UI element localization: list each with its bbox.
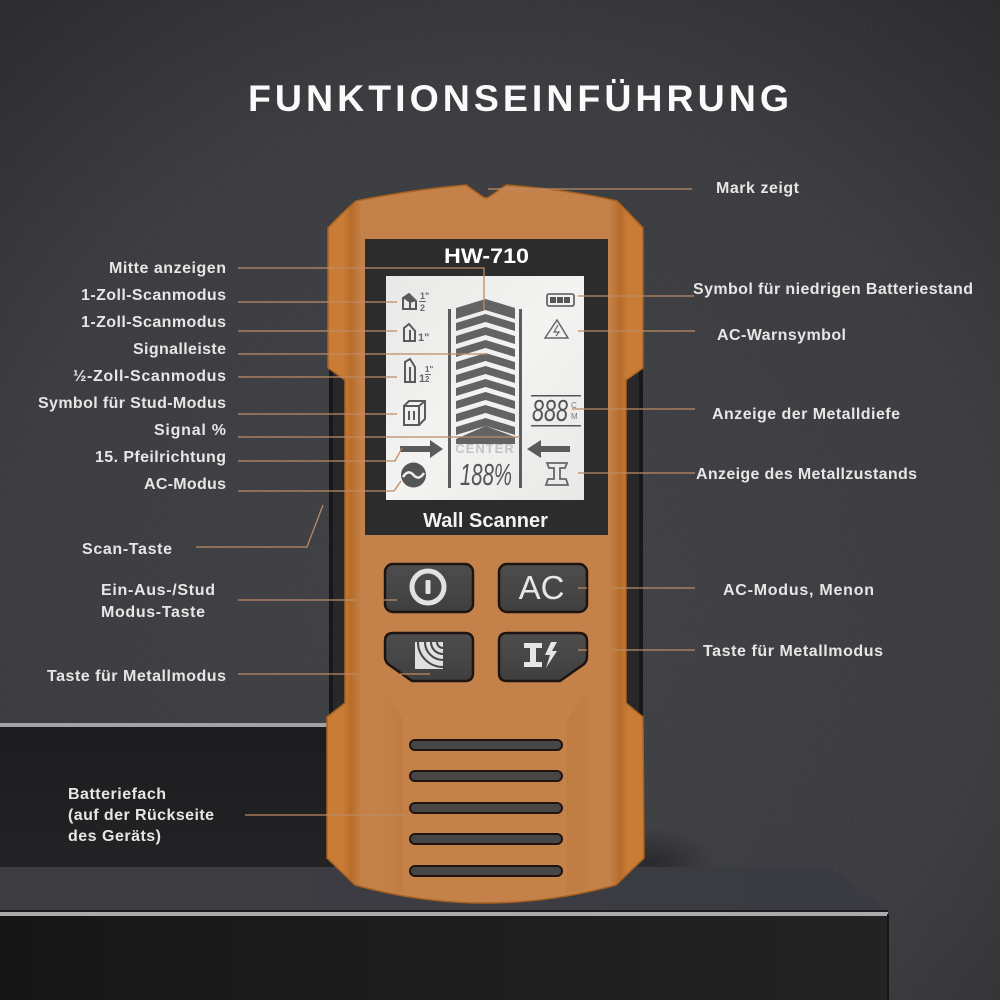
icon: left arrow xyxy=(400,440,443,458)
left labels: Ein-Aus-/Stud xyxy=(101,582,215,599)
left labels: Signalleiste xyxy=(133,341,226,358)
right labels: Anzeige des Metallzustands xyxy=(696,466,917,483)
left labels: Scan-Taste xyxy=(82,541,172,558)
device: wall scanner xyxy=(327,185,644,903)
right labels xyxy=(693,180,973,660)
power button xyxy=(385,564,473,612)
icon: battery xyxy=(547,294,574,306)
left labels: Symbol für Stud-Modus xyxy=(38,395,226,412)
left labels: (auf der Rückseite xyxy=(68,807,214,824)
left labels xyxy=(38,260,226,845)
right labels: Mark zeigt xyxy=(716,180,800,197)
icon: one and half inch mode: 1 xyxy=(419,373,425,385)
right labels: AC-Warnsymbol xyxy=(717,327,846,344)
screen xyxy=(365,239,608,535)
left labels: des Geräts) xyxy=(68,828,161,845)
left labels: 1-Zoll-Scanmodus xyxy=(81,287,226,304)
AC button: AC xyxy=(519,569,564,606)
title: FUNKTIONSEINFÜHRUNG xyxy=(248,77,789,119)
AC button xyxy=(499,564,587,612)
left labels: Modus-Taste xyxy=(101,604,205,621)
left labels: Mitte anzeigen xyxy=(109,260,226,277)
back shelf block xyxy=(0,723,335,867)
icon: one inch mode xyxy=(404,324,429,344)
metal depth readout: C xyxy=(571,401,577,410)
leader lines xyxy=(196,189,695,815)
icon: AC mode xyxy=(401,462,426,488)
icon: half inch mode xyxy=(403,291,429,313)
scan mode button xyxy=(385,633,473,681)
left labels: Batteriefach xyxy=(68,786,166,803)
device shadow on wall xyxy=(585,828,715,896)
signal chevron bar xyxy=(456,299,515,444)
icon: half inch mode: 2 xyxy=(420,303,425,313)
right labels: Symbol für niedrigen Batteriestand xyxy=(693,281,973,298)
scanner body xyxy=(327,185,644,903)
icon: one inch mode: 1" xyxy=(418,332,429,344)
metal depth readout: M xyxy=(571,412,578,421)
side grips xyxy=(329,368,643,718)
left labels: Taste für Metallmodus xyxy=(47,668,226,685)
metal mode button xyxy=(499,633,587,681)
signal percent readout: 188% xyxy=(460,457,512,492)
signal rails xyxy=(448,309,522,488)
lower flank shading xyxy=(377,677,597,893)
left labels: 15. Pfeilrichtung xyxy=(95,449,226,466)
icon: one and half inch mode: 2 xyxy=(425,375,430,384)
icon: half inch mode: 1" xyxy=(420,291,429,301)
lcd display xyxy=(386,276,584,500)
product name: Wall Scanner xyxy=(423,510,548,532)
icon: one and half inch mode xyxy=(405,359,433,385)
left labels: AC-Modus xyxy=(144,476,226,493)
right labels: AC-Modus, Menon xyxy=(723,582,874,599)
icon: power xyxy=(412,571,444,603)
icon: signal waves xyxy=(415,642,443,669)
icon: right arrow xyxy=(527,440,570,458)
right labels: Anzeige der Metalldiefe xyxy=(712,406,900,423)
icon: stud mode xyxy=(404,401,425,425)
center text: CENTER xyxy=(455,441,515,456)
icon: metal beam xyxy=(546,463,568,485)
front shelf xyxy=(0,867,889,1000)
icon: one and half inch mode: 1" xyxy=(425,365,433,374)
icon: beam and bolt xyxy=(524,642,557,668)
icon: AC warning xyxy=(545,320,568,338)
metal depth readout: 888 xyxy=(532,393,569,428)
right labels: Taste für Metallmodus xyxy=(703,643,883,660)
model name: HW-710 xyxy=(444,245,529,268)
left labels: 1-Zoll-Scanmodus xyxy=(81,314,226,331)
vent slots xyxy=(410,740,562,876)
left labels: Signal % xyxy=(154,422,226,439)
left labels: ½-Zoll-Scanmodus xyxy=(73,368,226,385)
